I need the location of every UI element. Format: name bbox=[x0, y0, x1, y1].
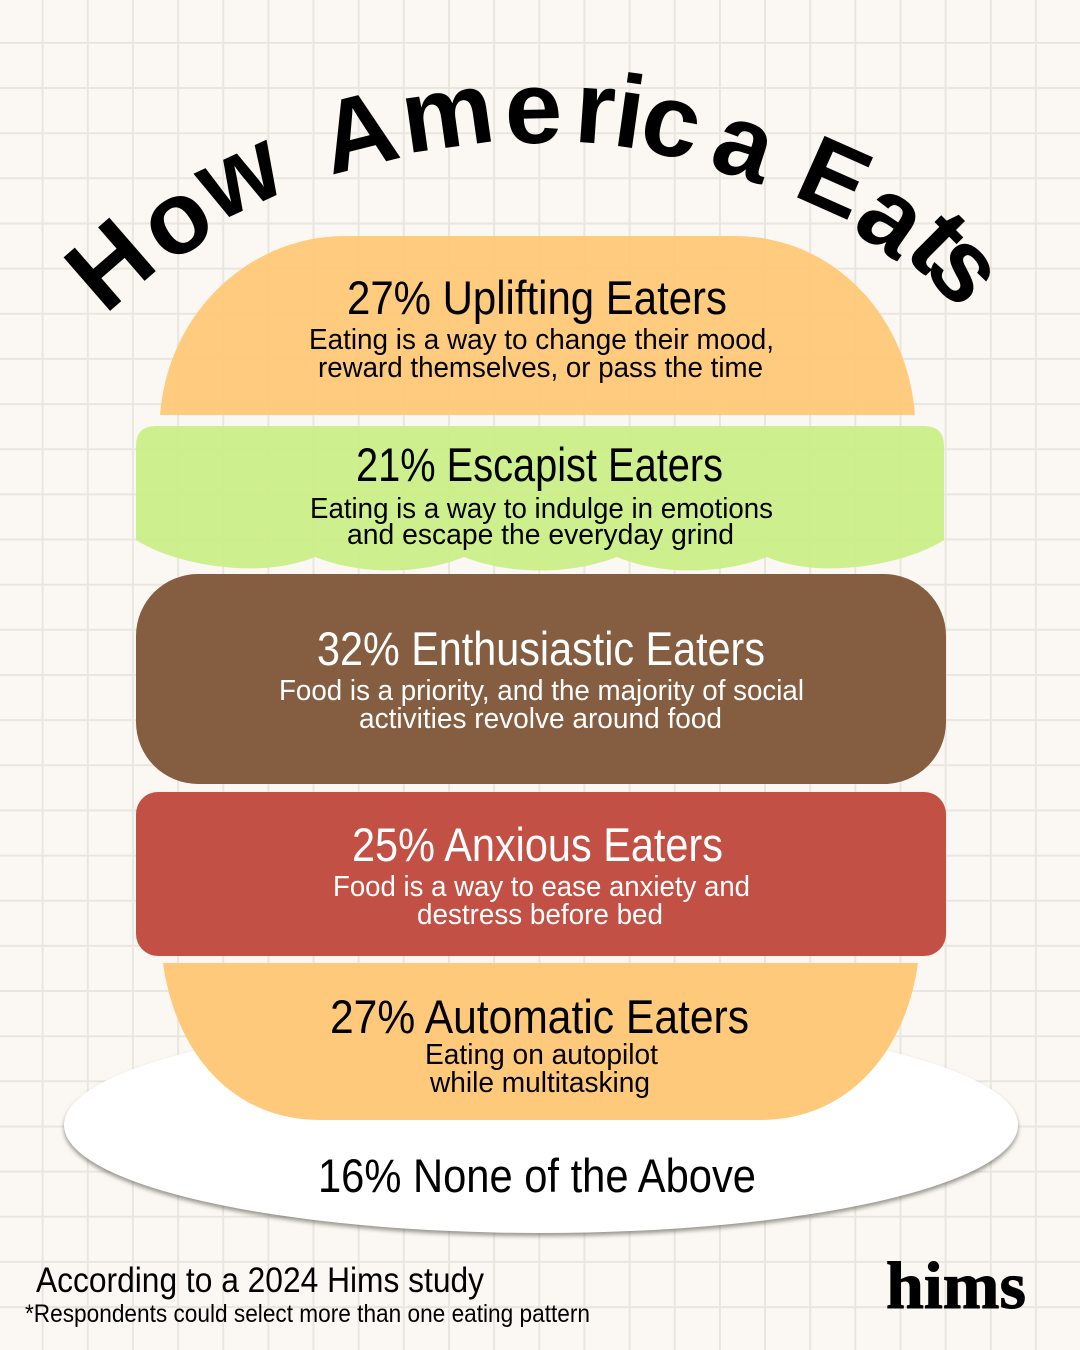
panel: tomato, anxious eaters bbox=[136, 792, 946, 956]
description: Eating is a way to indulge in emotions bbox=[310, 493, 773, 525]
panel: patty, enthusiastic eaters bbox=[136, 574, 946, 784]
title: How America Eats: c bbox=[631, 58, 713, 183]
title: How America Eats bbox=[44, 49, 1030, 332]
description: destress before bed bbox=[417, 899, 663, 931]
description: activities revolve around food bbox=[359, 703, 722, 735]
description bbox=[425, 1039, 658, 1099]
heading: 32% Enthusiastic Eaters bbox=[317, 622, 765, 675]
description: while multitasking bbox=[429, 1067, 650, 1099]
description bbox=[333, 871, 750, 931]
description: reward themselves, or pass the time bbox=[318, 352, 763, 384]
title: How America Eats: w bbox=[176, 104, 299, 243]
description: and escape the everyday grind bbox=[347, 519, 734, 551]
title: How America Eats: m bbox=[394, 49, 500, 175]
description bbox=[309, 324, 774, 384]
title: How America Eats: r bbox=[571, 49, 619, 166]
description: Food is a priority, and the majority of social bbox=[279, 675, 804, 707]
panel: top bun, uplifting eaters bbox=[160, 236, 915, 415]
description bbox=[310, 493, 773, 551]
source note: According to a 2024 Hims study bbox=[36, 1261, 484, 1300]
title: How America Eats: e bbox=[504, 50, 563, 165]
title: How America Eats: s bbox=[905, 208, 1030, 326]
logo: hims: hims bbox=[886, 1249, 1026, 1323]
title: How America Eats: a bbox=[700, 79, 791, 206]
footnote: *Respondents could select more than one eating pattern bbox=[25, 1300, 590, 1328]
title: How America Eats: H bbox=[44, 196, 176, 332]
title: How America Eats: t bbox=[886, 187, 992, 293]
title: How America Eats: E bbox=[783, 113, 887, 240]
plate label: 16% None of the Above bbox=[318, 1149, 756, 1202]
title: How America Eats: o bbox=[117, 153, 232, 284]
heading: 21% Escapist Eaters bbox=[356, 438, 723, 491]
description: Eating on autopilot bbox=[425, 1039, 658, 1071]
panel: bottom bun, automatic eaters bbox=[163, 963, 918, 1120]
panel: lettuce, escapist eaters bbox=[136, 426, 944, 570]
description: Food is a way to ease anxiety and bbox=[333, 871, 750, 903]
plate: none of the above bbox=[64, 1017, 1018, 1233]
title: How America Eats: a bbox=[837, 152, 950, 280]
heading: 25% Anxious Eaters bbox=[352, 818, 723, 871]
description bbox=[279, 675, 804, 735]
heading: 27% Automatic Eaters bbox=[330, 990, 749, 1043]
title: How America Eats: i bbox=[608, 53, 652, 171]
title: How America Eats: A bbox=[308, 67, 408, 196]
heading: 27% Uplifting Eaters bbox=[347, 271, 727, 324]
description: Eating is a way to change their mood, bbox=[309, 324, 774, 356]
